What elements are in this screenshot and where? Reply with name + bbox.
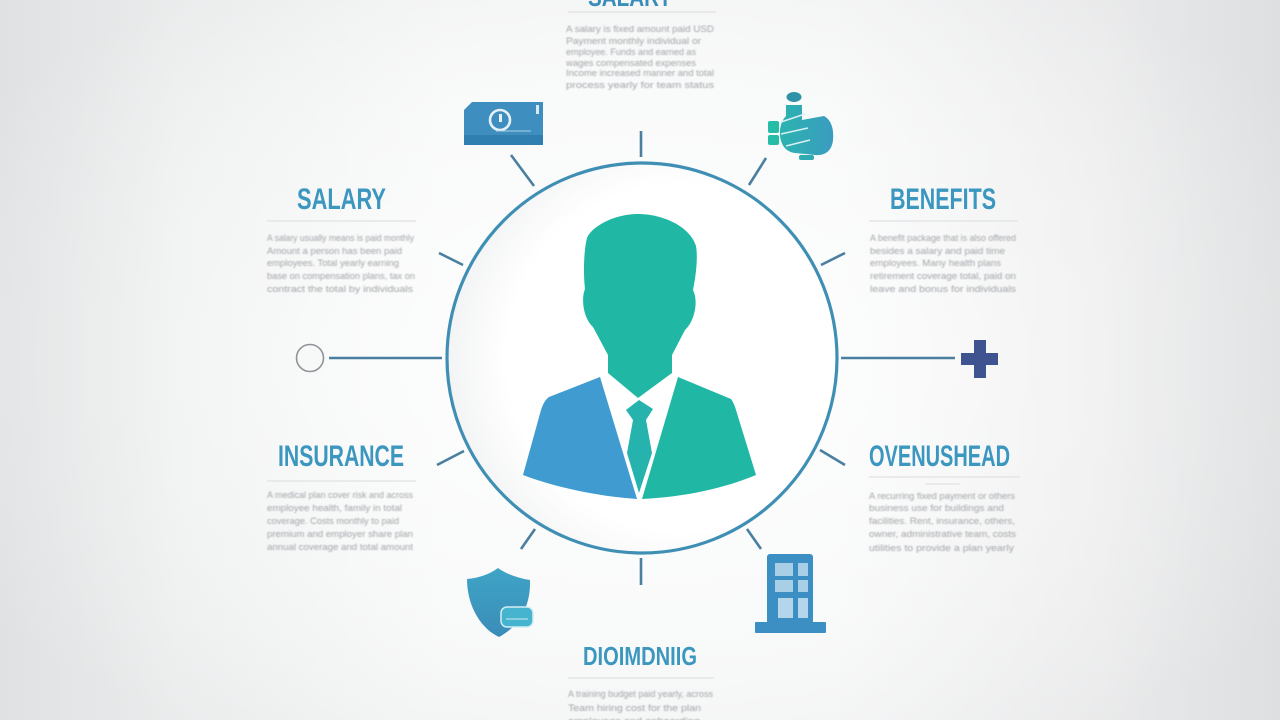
right text block: benefits: A benefit package that is also offered <box>870 233 1016 244</box>
central circle <box>447 163 837 553</box>
tie <box>626 400 653 493</box>
right text block: benefits: BENEFITS <box>890 183 996 216</box>
top text block: salary: process yearly for team status <box>566 80 714 91</box>
left text block: insurance: premium and employer share plan <box>267 529 413 540</box>
right text block: overhead: A recurring fixed payment or others <box>869 491 1015 502</box>
top text block: salary <box>565 0 716 91</box>
top text block: salary: Payment monthly individual or <box>566 36 701 47</box>
bottom text block: dioimdniig <box>568 641 714 720</box>
right text block: overhead: business use for buildings and <box>869 503 1004 514</box>
right text block: benefits: retirement coverage total, paid on <box>870 271 1016 282</box>
icon: shield <box>467 568 533 637</box>
right text block: benefits <box>869 183 1018 295</box>
icon: money card <box>464 102 543 145</box>
left text block: insurance: employee health, family in total <box>267 503 402 514</box>
left text block: salary <box>267 183 416 295</box>
bottom text block: dioimdniig: A training budget paid yearly, across <box>568 689 713 700</box>
left text block: insurance <box>267 440 416 553</box>
top text block: salary: Income increased manner and total <box>566 68 714 79</box>
top text block: salary: wages compensated expenses <box>565 58 696 69</box>
right text block: benefits: employees. Many health plans <box>870 258 1001 269</box>
head and neck <box>583 214 697 398</box>
icon: thumbs up hand <box>768 92 833 160</box>
left text block: insurance: A medical plan cover risk and across <box>267 490 413 501</box>
right text block: overhead <box>869 440 1020 554</box>
left jacket <box>523 377 637 499</box>
bottom text block: dioimdniig: DIOIMDNIIG <box>583 641 697 671</box>
left text block: salary: base on compensation plans, tax on <box>267 271 415 282</box>
top text block: salary: employee. Funds and earned as <box>566 47 696 58</box>
top text block: salary: A salary is fixed amount paid USD <box>566 24 714 35</box>
right jacket <box>642 377 756 499</box>
right connector and plus icon <box>841 340 998 378</box>
left text block: salary: A salary usually means is paid monthly <box>267 233 414 244</box>
left text block: salary: contract the total by individuals <box>267 284 413 295</box>
left connector and circle icon <box>296 344 442 372</box>
left text block: insurance: INSURANCE <box>278 440 404 473</box>
right text block: overhead: facilities. Rent, insurance, others, <box>869 516 1015 527</box>
left text block: insurance: annual coverage and total amount <box>267 542 413 553</box>
right text block: benefits: leave and bonus for individuals <box>870 284 1016 295</box>
radial tick marks <box>437 131 845 585</box>
left text block: insurance: coverage. Costs monthly to paid <box>267 516 399 527</box>
left text block: salary: employees. Total yearly earning <box>267 258 399 269</box>
icon: building <box>755 554 826 633</box>
person silhouette <box>523 214 756 499</box>
right text block: overhead: OVENUSHEAD <box>869 440 1010 473</box>
right text block: benefits: besides a salary and paid time <box>870 246 1005 257</box>
left text block: salary: Amount a person has been paid <box>267 246 402 257</box>
right text block: overhead: utilities to provide a plan yearly <box>869 543 1014 554</box>
right text block: overhead: owner, administrative team, costs <box>869 529 1016 540</box>
bottom text block: dioimdniig: Team hiring cost for the plan <box>568 703 701 714</box>
left text block: salary: SALARY <box>297 183 386 216</box>
